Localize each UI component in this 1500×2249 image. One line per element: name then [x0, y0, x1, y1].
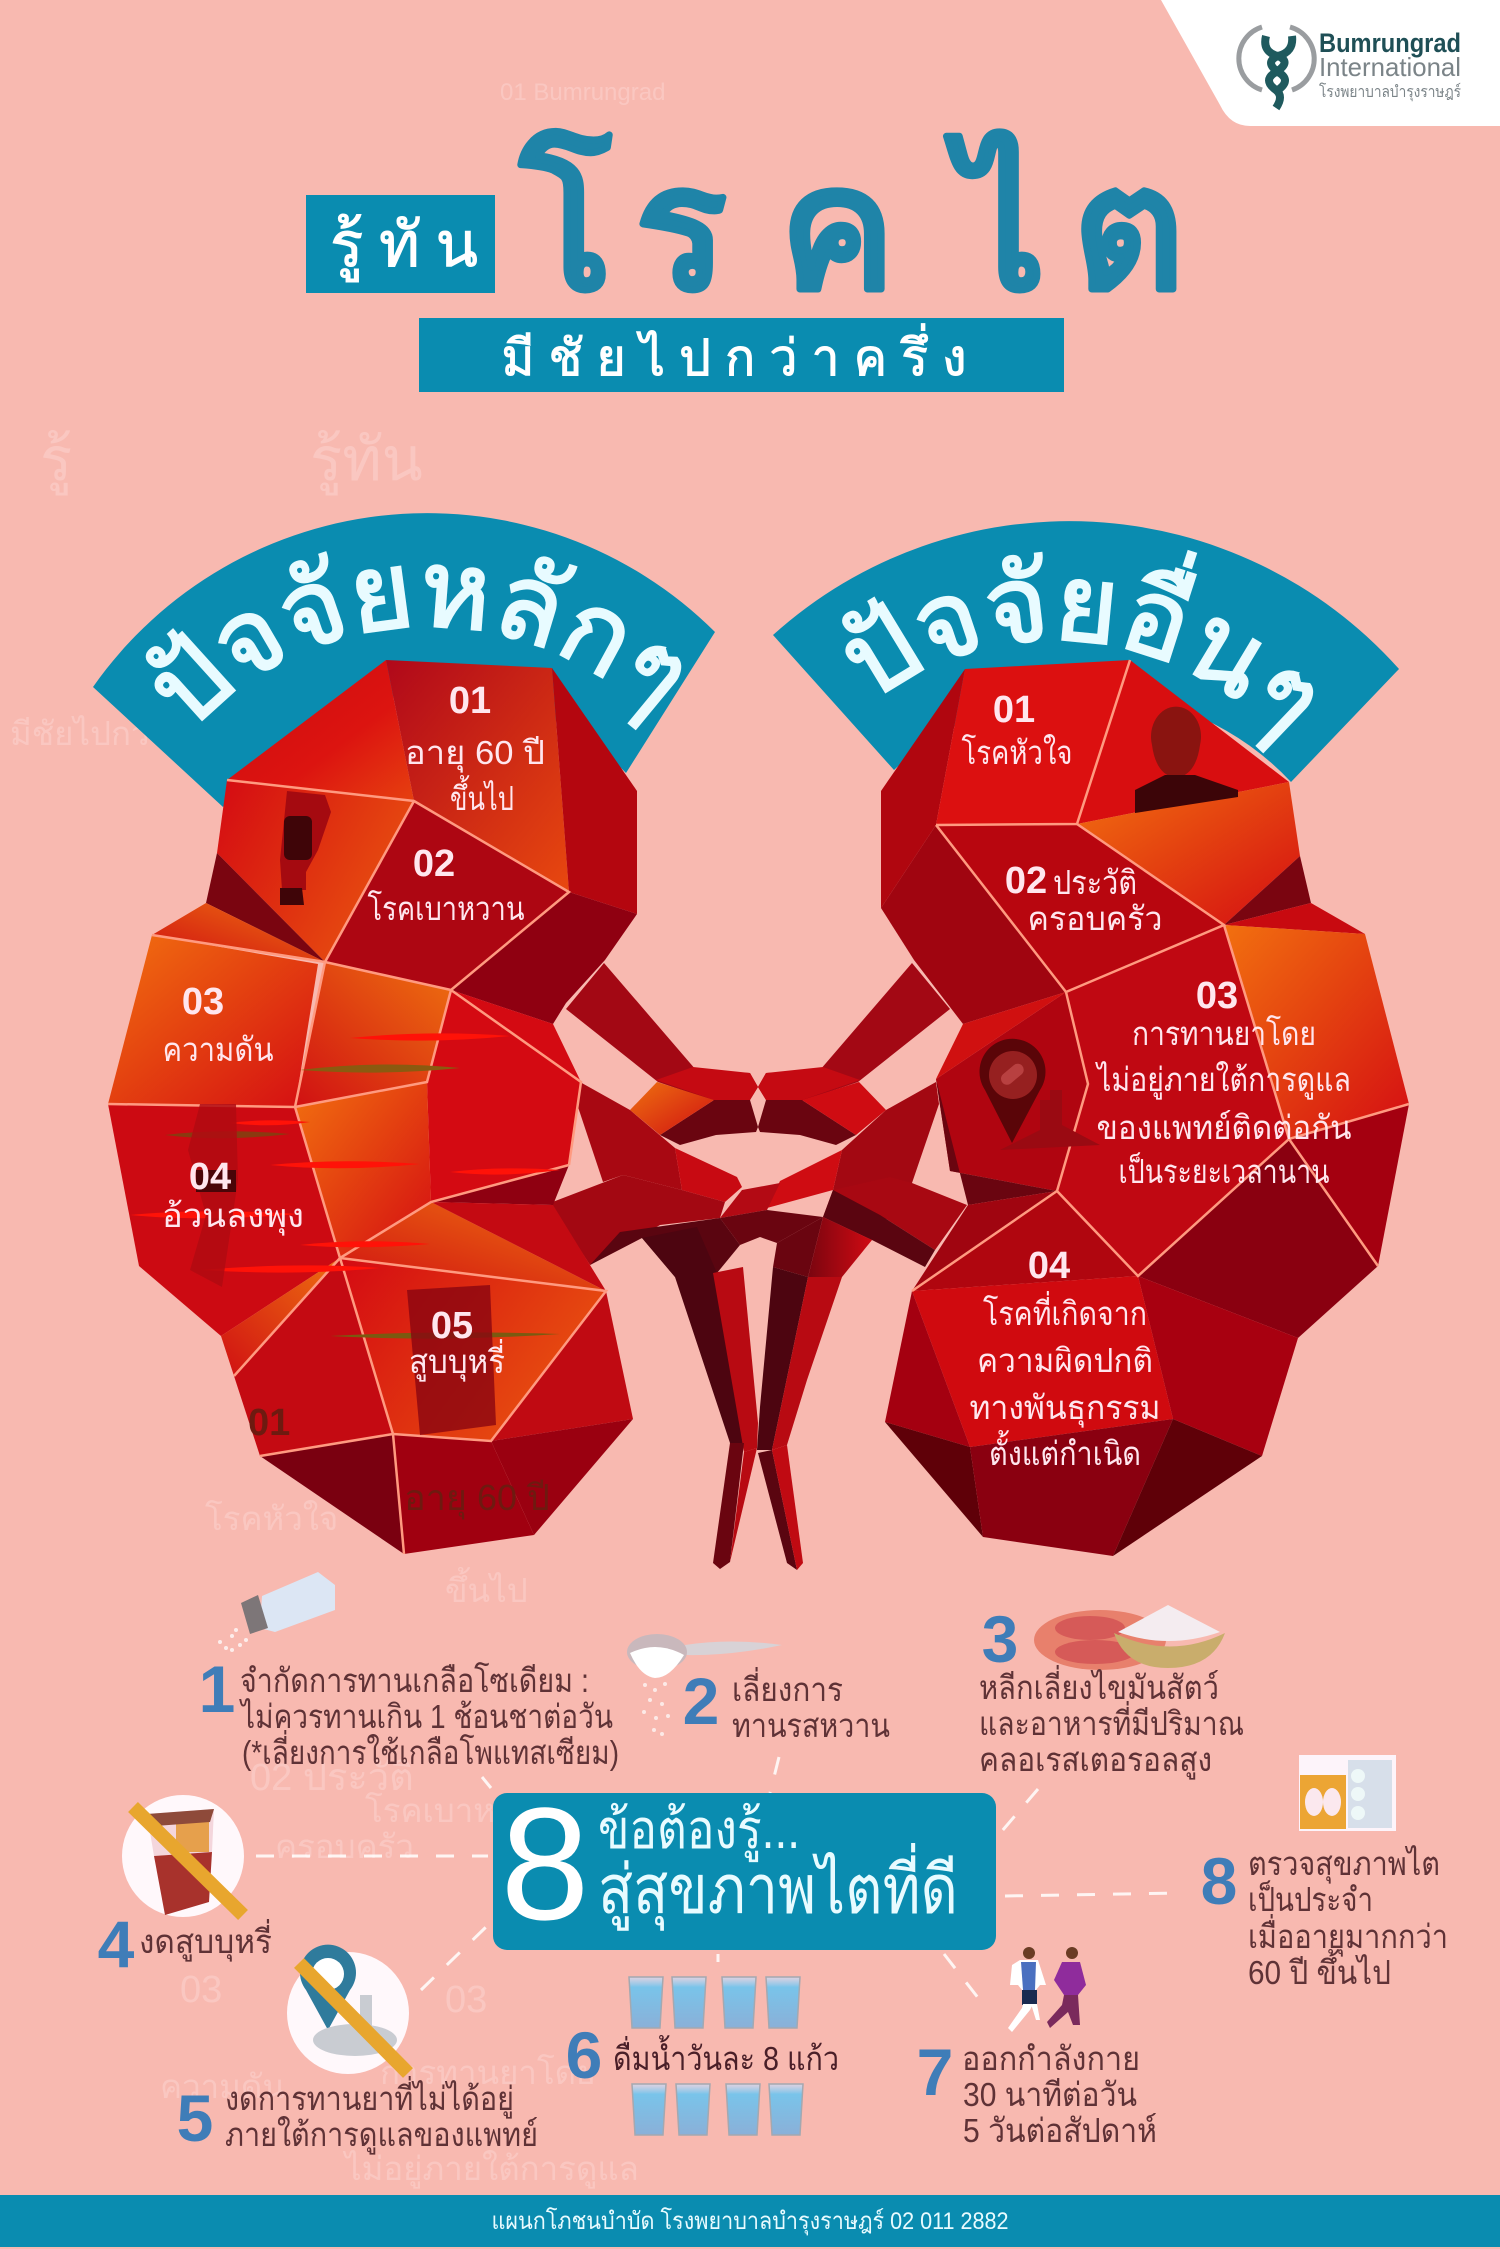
tip 7 text: 30 นาทีต่อวัน: [963, 2076, 1137, 2113]
tip 2 text: [732, 1667, 890, 1744]
label 01: 01: [993, 689, 1035, 731]
background ghost artifacts: 01 Bumrungrad: [500, 79, 665, 106]
label 03: ของแพทย์ติดต่อกัน: [1096, 1109, 1352, 1146]
tip 8 text: เป็นประจำ: [1248, 1880, 1373, 1918]
ureter lower right: [720, 1082, 967, 1570]
tip 8 text: เมื่ออายุมากกว่า: [1248, 1914, 1448, 1957]
ureter upper right: [758, 963, 950, 1145]
label 04: [162, 1156, 304, 1236]
tip 8: annual check: [1201, 1755, 1448, 1991]
tip 7: exercise: [917, 1947, 1157, 2149]
ghost label on kidney: 01: [248, 1402, 290, 1444]
tip 3 text: และอาหารที่มีปริมาณ: [979, 1701, 1244, 1742]
background ghost artifacts: โรคเบาหวาน: [365, 1792, 555, 1829]
label 04: โรคที่เกิดจาก: [983, 1291, 1147, 1332]
label 03: 03: [1196, 975, 1238, 1017]
label 03: เป็นระยะเวลานาน: [1118, 1152, 1330, 1190]
tip 8 text: 60 ปี ขึ้นไป: [1248, 1949, 1391, 1991]
tip 1: salt: [199, 1572, 619, 1771]
tip 5: no unsupervised medication: [177, 1945, 538, 2155]
logo wordmark: Bumrungrad: [1319, 28, 1461, 58]
banner: ปัจจัยหลักๆ: ปัจจัยหลักๆ: [146, 551, 682, 730]
label 04: ทางพันธุกรรม: [970, 1389, 1160, 1428]
number 6: 6: [566, 2018, 602, 2092]
label 02: 02: [413, 843, 455, 885]
label 03: ไม่อยู่ภายใต้การดูแล: [1094, 1061, 1351, 1100]
number 1: 1: [199, 1652, 235, 1726]
icon: meat and bowl: [1034, 1605, 1225, 1670]
icon: salt shaker: [218, 1572, 335, 1652]
central panel: 8 ข้อต้องรู้: [493, 1774, 996, 1953]
title main: โรคไต: โรคไต: [519, 131, 1186, 327]
background ghost artifacts: มีชัยไปกว่าครึ่ง: [10, 711, 224, 752]
background ghost artifacts: ครอบครัว: [275, 1828, 414, 1865]
label 03: [162, 981, 274, 1068]
label 01: [405, 680, 545, 817]
tip 5 text: ภายใต้การดูแลของแพทย์: [225, 2116, 538, 2155]
label 03: 03: [182, 981, 224, 1023]
background ghost artifacts: รู้: [40, 426, 72, 496]
icon: hospital caduceus: [1239, 27, 1314, 108]
label 04: [970, 1245, 1160, 1472]
label 03: การทานยาโดย: [1132, 1015, 1316, 1052]
photo: cigarette pack: [407, 1285, 496, 1435]
label 02: ประวัติ: [1053, 864, 1137, 901]
logo wordmark: โรงพยาบาลบำรุงราษฎร์: [1319, 82, 1461, 102]
title: [306, 131, 1186, 392]
icon: runners: [1008, 1947, 1086, 2032]
tip 8 text: ตรวจสุขภาพไต: [1248, 1845, 1440, 1884]
number 2: 2: [683, 1664, 719, 1738]
label 04: 04: [189, 1156, 231, 1198]
label 01: ขึ้นไป: [450, 775, 514, 817]
label 02: [368, 843, 524, 927]
label 04: ตั้งแต่กำเนิด: [989, 1430, 1141, 1472]
label 05: สูบบุหรี่: [409, 1339, 505, 1382]
left kidney: [108, 660, 637, 1554]
ureter lower left: [550, 1082, 758, 1569]
label 04: อ้วนลงพุง: [162, 1197, 304, 1236]
central panel: 8 ข้อต้องรู้: 8: [501, 1774, 589, 1953]
number 7: 7: [917, 2035, 953, 2109]
background ghost artifacts: 03: [180, 1969, 222, 2011]
subtitle: มีชัยไปกว่าครึ่ง: [419, 318, 1064, 392]
title tag: รู้ทัน: รู้ทัน: [330, 211, 478, 282]
background ghost artifacts: ความดัน: [160, 2068, 285, 2105]
tip 5 text: งดการทานยาที่ไม่ได้อยู่: [225, 2076, 514, 2119]
label 03: ความดัน: [162, 1031, 274, 1068]
photo: obese belly: [188, 1104, 238, 1287]
tip 7 text: [962, 2040, 1157, 2149]
label 04: ความผิดปกติ: [977, 1342, 1153, 1379]
tip 3 text: หลีกเลี่ยงไขมันสัตว์: [979, 1665, 1219, 1706]
background ghost artifacts: 02 ประวัติ: [250, 1757, 414, 1799]
central panel: 8 ข้อต้องรู้: ข้อต้องรู้...: [598, 1800, 800, 1862]
footer bar: แผนกโภชนบำบัด โรงพยาบาลบำรุงราษฎร์ 02 011 2882: [492, 2207, 1008, 2236]
number 5: 5: [177, 2081, 213, 2155]
icon: glasses row 1: [629, 1977, 800, 2028]
background ghost artifacts: รู้ทัน: [310, 426, 423, 496]
logo wordmark: International: [1319, 52, 1461, 82]
tip 4: no smoking: [98, 1795, 272, 1981]
icon: map pin with pill: [980, 1039, 1100, 1150]
number 4: 4: [98, 1907, 135, 1981]
ureter upper left: [566, 963, 758, 1145]
icon: cigarette pack with slash: [122, 1795, 244, 1917]
tip 6 text: ดื่มน้ำวันละ 8 แก้ว: [613, 2035, 839, 2077]
icon: glasses row 2: [632, 2084, 803, 2135]
tip 1 text: [238, 1662, 619, 1771]
background ghost artifacts: โรคหัวใจ: [205, 1500, 338, 1537]
tip 3 text: คลอเรสเตอรอลสูง: [979, 1741, 1212, 1780]
tip 2 text: เลี่ยงการ: [732, 1667, 843, 1708]
label 02: ครอบครัว: [1028, 900, 1162, 937]
tip 5 text: [225, 2076, 538, 2155]
ureter structure: [550, 963, 967, 1570]
background ghost artifacts: 03: [445, 1979, 487, 2021]
number 3: 3: [982, 1602, 1018, 1676]
tip 1 text: (*เลี่ยงการใช้เกลือโพแทสเซียม): [242, 1730, 619, 1771]
label 04: 04: [1028, 1245, 1070, 1287]
label 01: [962, 689, 1072, 771]
logo panel: [1161, 0, 1500, 126]
title tag: รู้ทัน: [306, 195, 495, 293]
tip 3 text: [979, 1665, 1244, 1780]
tip 8 text: [1248, 1845, 1448, 1991]
banner: ปัจจัยอื่นๆ: ปัจจัยอื่นๆ: [842, 550, 1314, 754]
ghost label on kidney: [248, 1402, 550, 1520]
background ghost artifacts: [10, 79, 665, 2189]
subtitle: มีชัยไปกว่าครึ่ง: มีชัยไปกว่าครึ่ง: [502, 324, 966, 386]
background ghost artifacts: การทานยาโดย: [380, 2054, 595, 2091]
label 01: 01: [449, 680, 491, 722]
photo: man legs: [280, 791, 331, 905]
tip 1 text: ไม่ควรทานเกิน 1 ช้อนชาต่อวัน: [238, 1698, 613, 1735]
label 02: 02: [1005, 860, 1047, 902]
logo wordmark: [1319, 28, 1461, 102]
central panel: 8 ข้อต้องรู้: สู่สุขภาพไตที่ดี: [598, 1843, 958, 1931]
label 02: โรคเบาหวาน: [368, 890, 524, 927]
background ghost artifacts: ขึ้นไป: [445, 1567, 528, 1609]
icon: spoon of sugar: [627, 1634, 782, 1736]
tip 3: fat: [979, 1602, 1244, 1780]
number 8: 8: [1201, 1844, 1237, 1918]
tip 1 text: จำกัดการทานเกลือโซเดียม :: [240, 1662, 589, 1699]
label 05: 05: [431, 1305, 473, 1347]
label 05: [409, 1305, 505, 1382]
tip 6: water: [566, 1977, 839, 2135]
label 01: อายุ 60 ปี: [405, 734, 545, 773]
right kidney: [881, 660, 1409, 1556]
dashed connectors: [256, 1757, 1179, 2008]
photo: elderly man: [1135, 707, 1238, 813]
icon: pin with slash: [287, 1945, 409, 2074]
tip 2 text: ทานรสหวาน: [732, 1707, 890, 1744]
icon: kidney report: [1299, 1755, 1396, 1831]
compression streaks: [130, 1033, 560, 1339]
background ghost artifacts: ไม่อยู่ภายใต้การดูแล: [342, 2150, 639, 2189]
ghost label on kidney: อายุ 60 ปี: [404, 1477, 550, 1520]
label 02: [1005, 860, 1162, 937]
tip 7 text: ออกกำลังกาย: [962, 2040, 1140, 2077]
label 01: โรคหัวใจ: [962, 734, 1072, 771]
tip 4 text: งดสูบบุหรี่: [139, 1919, 272, 1962]
tip 7 text: 5 วันต่อสัปดาห์: [963, 2112, 1157, 2149]
tip 2: sugar: [627, 1634, 890, 1744]
footer bar: [0, 2195, 1500, 2247]
label 03: [1094, 975, 1352, 1190]
